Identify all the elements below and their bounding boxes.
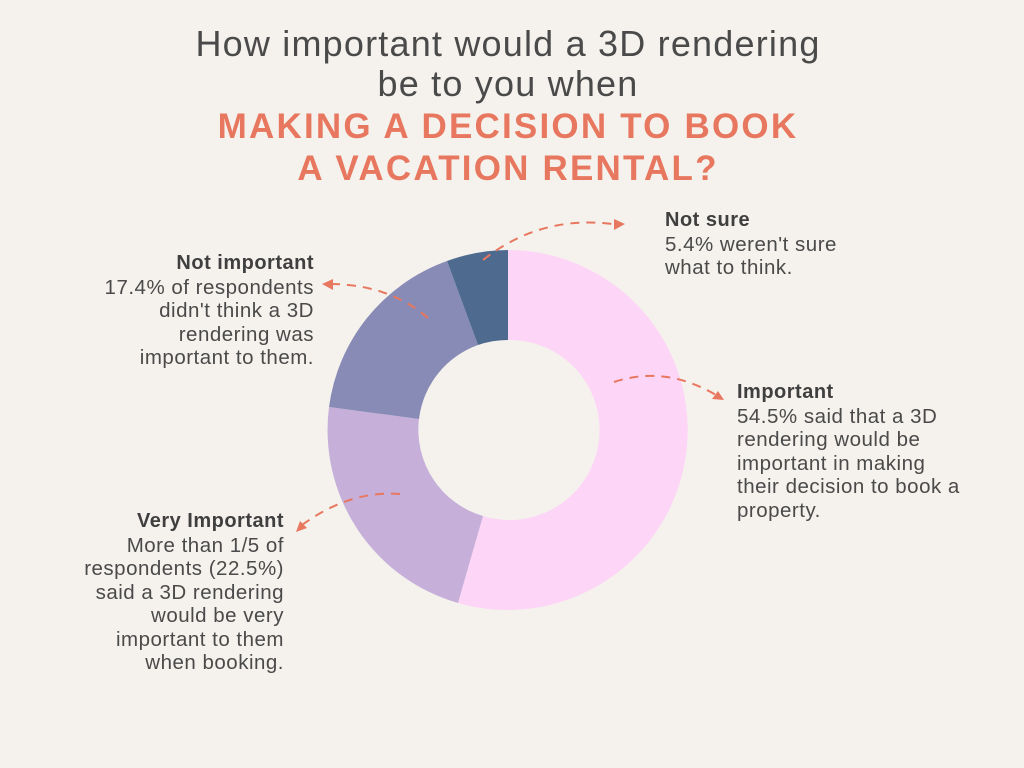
label: very important: said a 3D rendering xyxy=(96,580,284,604)
label: very important: respondents (22.5%) xyxy=(84,557,284,580)
label: important: 54.5% said that a 3D xyxy=(737,404,937,428)
title: How important would a 3D rendering xyxy=(195,23,821,64)
label: very important: would be very xyxy=(151,604,284,627)
title: A VACATION RENTAL? xyxy=(297,149,719,188)
label: important: property. xyxy=(737,498,821,522)
label: very important: when booking. xyxy=(145,651,284,674)
label: not sure: Not sure xyxy=(665,209,750,231)
label: not sure: what to think. xyxy=(665,256,793,279)
title: MAKING A DECISION TO BOOK xyxy=(218,107,798,146)
label: not important: 17.4% of respondents xyxy=(105,276,314,298)
label: important: their decision to book a xyxy=(737,475,960,498)
label: important: Important xyxy=(737,381,834,403)
label: not sure xyxy=(665,209,837,279)
label: not important: rendering was xyxy=(179,322,314,346)
label: not sure: 5.4% weren't sure xyxy=(665,232,837,256)
title: be to you when xyxy=(378,63,638,104)
label: very important: important to them xyxy=(116,628,284,650)
label: not important: important to them. xyxy=(140,346,314,369)
label: not important: didn't think a 3D xyxy=(159,299,314,322)
label: not important xyxy=(105,252,314,369)
label: very important xyxy=(84,510,284,674)
title xyxy=(195,23,821,188)
label: important: important in making xyxy=(737,452,925,474)
label: not important: Not important xyxy=(176,252,314,274)
label: very important: More than 1/5 of xyxy=(127,534,284,556)
arrows xyxy=(302,222,716,525)
label: important: rendering would be xyxy=(737,428,920,451)
label: important xyxy=(737,381,960,522)
label: very important: Very Important xyxy=(137,510,284,532)
